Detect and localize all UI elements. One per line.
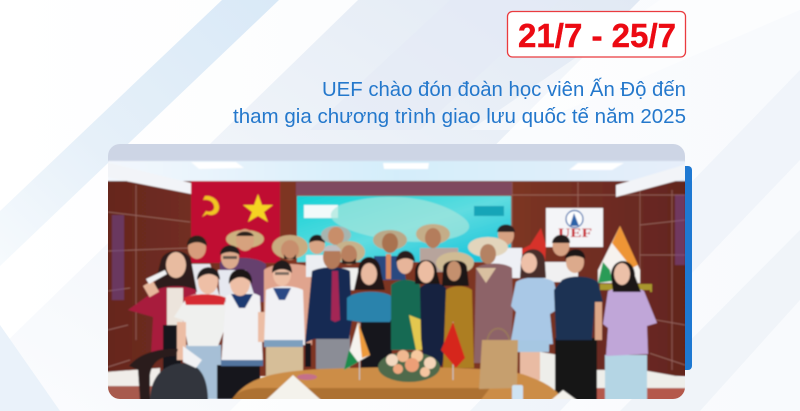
vietnamese flag on wall (191, 181, 280, 263)
small vietnamese flag (441, 322, 465, 380)
small indian flag (344, 322, 370, 380)
girl in white and navy polo (217, 269, 266, 399)
wall panel lines (108, 182, 685, 370)
man with hat, pink shirt (264, 235, 314, 345)
woman in navy suit (415, 260, 448, 366)
woman in red blazer (128, 251, 197, 375)
woman in pale blue shirt (511, 249, 560, 380)
tall man, white polo (490, 224, 522, 278)
floor (106, 290, 687, 401)
girl with glasses, polo and khaki trousers (264, 260, 305, 379)
backpack (150, 363, 208, 401)
table edge (231, 388, 490, 401)
date badge: 21/7 - 25/7 (518, 17, 676, 54)
chair (129, 349, 178, 401)
group photo (106, 142, 687, 401)
man in navy polo (554, 249, 603, 401)
bearded man with hat (333, 241, 365, 290)
projection screen (297, 196, 511, 262)
front row people (128, 237, 657, 401)
woman with hat in mauve sari (468, 237, 513, 363)
man with glasses, white shirt (306, 235, 328, 277)
woman in lilac top (603, 261, 657, 401)
papers in hand (183, 346, 202, 368)
heading text (233, 78, 686, 128)
woman with hat in mustard dress (436, 252, 474, 368)
heading text: tham gia chương trình giao lưu quốc tế năm 2025 (233, 106, 686, 128)
ceiling lights (191, 162, 624, 170)
UEF sign (546, 208, 603, 247)
photo top strip (108, 144, 685, 162)
man with hat, patterned shirt (416, 224, 458, 272)
ceiling (108, 161, 685, 183)
flower arrangement (378, 350, 440, 382)
left purple wall reflection (112, 215, 124, 300)
standing flags (520, 226, 652, 292)
right purple wall reflection (675, 195, 685, 265)
girl in white and red polo (174, 267, 227, 399)
woman in blue blouse (347, 257, 393, 368)
blue accent bar (685, 166, 692, 370)
upper wall band (296, 182, 512, 195)
table small object (297, 374, 317, 380)
water bottle (512, 385, 523, 401)
man with hat, navy suit (373, 230, 407, 280)
man in navy shirt with red tie (305, 245, 352, 369)
UEF sign: UEF (558, 225, 592, 240)
napkin cones (265, 375, 578, 401)
ceiling soffits (106, 162, 687, 197)
man with hat, back (321, 226, 351, 245)
woman in green ao dai (391, 251, 422, 350)
back row people (186, 224, 578, 345)
conference table (231, 367, 565, 401)
man in white shirt (186, 234, 220, 296)
man behind, white shirt (542, 235, 578, 282)
heading text: UEF chào đón đoàn học viên Ấn Độ đến (322, 78, 686, 101)
paper gift bag (479, 328, 518, 389)
room wall (106, 181, 687, 376)
man with conical hat, purple shirt (220, 229, 266, 302)
man with glasses (218, 245, 256, 300)
